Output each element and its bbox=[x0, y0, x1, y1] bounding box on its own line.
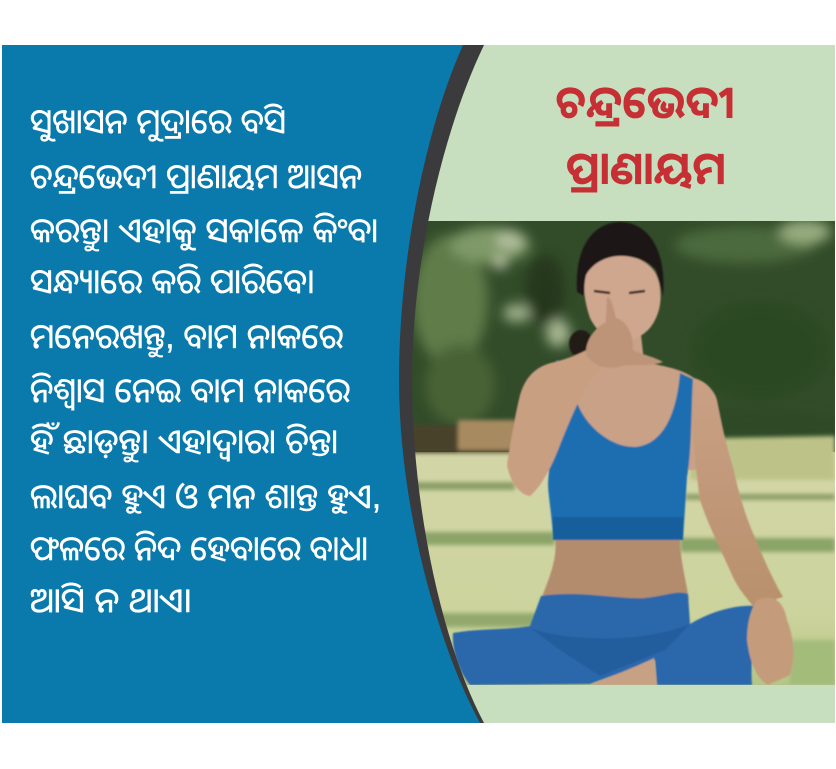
body text: ଆସି ନ ଥାଏ। bbox=[30, 582, 192, 620]
body text: ଲାଘବ ହୁଏ ଓ ମନ ଶାନ୍ତ ହୁଏ, bbox=[30, 478, 381, 516]
woman: hair bun bbox=[569, 330, 593, 358]
woman: right arm bbox=[690, 380, 783, 606]
photo: woman practising pranayama bbox=[395, 220, 836, 685]
body text: ନିଶ୍ୱାସ ନେଇ ବାମ ନାକରେ bbox=[30, 372, 350, 411]
photo backdrop: trees and lawn bbox=[395, 220, 836, 685]
woman: hand at nose bbox=[586, 297, 663, 368]
body text: ସନ୍ଧ୍ୟାରେ କରି ପାରିବେ। bbox=[30, 263, 315, 301]
body text: ସୁଖାସନ ମୁଦ୍ରାରେ ବସି bbox=[30, 103, 286, 142]
woman: hand on knee bbox=[747, 598, 793, 685]
woman: raised arm bbox=[506, 350, 590, 496]
body text: କରନ୍ତୁ। ଏହାକୁ ସକାଳେ କିଂବା bbox=[30, 212, 378, 252]
body text: ମନେରଖନ୍ତୁ, ବାମ ନାକରେ bbox=[30, 318, 343, 358]
background panel: pale green bbox=[300, 45, 835, 723]
heading: Chandrabhedi Pranayama bbox=[556, 76, 734, 194]
heading: Chandrabhedi Pranayama: ପ୍ରାଣାୟମ bbox=[566, 142, 726, 194]
woman: midriff bbox=[541, 538, 689, 600]
heading: Chandrabhedi Pranayama: ଚନ୍ଦ୍ରଭେଦୀ bbox=[556, 76, 734, 128]
woman: face bbox=[584, 256, 661, 342]
woman: blue top bbox=[548, 360, 693, 540]
woman: neck and shoulders bbox=[576, 334, 712, 471]
woman: blue leggings bbox=[453, 593, 757, 685]
body text: ଚନ୍ଦ୍ରଭେଦୀ ପ୍ରାଣାୟମ ଆସନ bbox=[30, 158, 362, 196]
body text: ଫଳରେ ନିଦ ହେବାରେ ବାଧା bbox=[30, 530, 368, 568]
woman: hair bbox=[577, 222, 664, 296]
woman: crossed foot skin bbox=[590, 658, 657, 685]
blue panel bbox=[2, 45, 480, 723]
curved dark band bbox=[300, 45, 484, 723]
body text bbox=[30, 103, 381, 620]
body text: ହିଁ ଛାଡ଼ନ୍ତୁ। ଏହାଦ୍ୱାରା ଚିନ୍ତା bbox=[30, 422, 338, 463]
